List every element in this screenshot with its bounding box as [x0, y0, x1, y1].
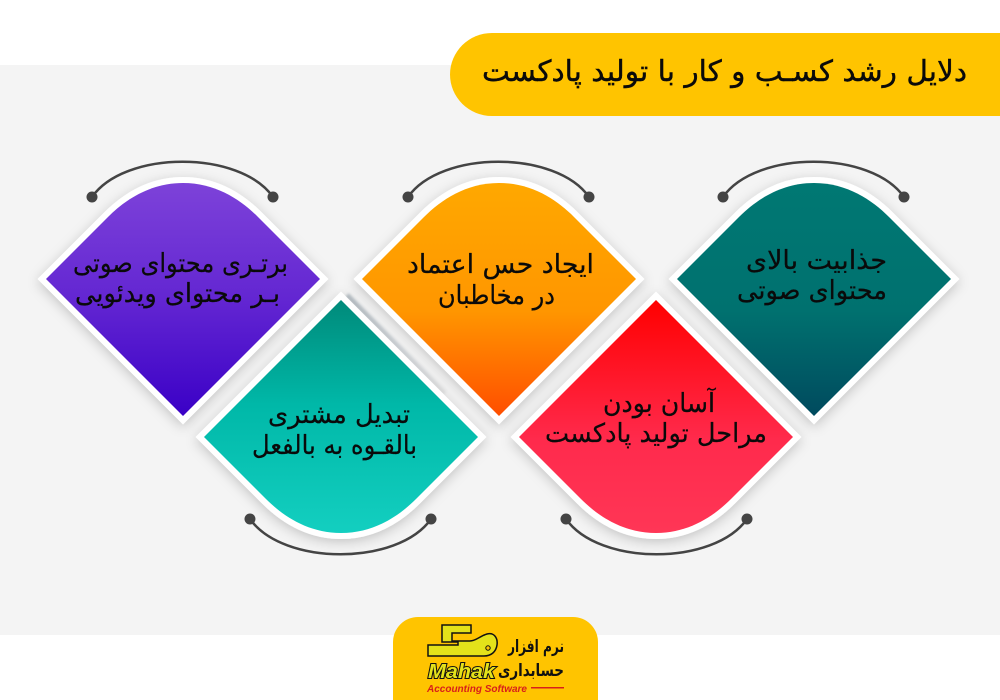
icon: mahak mark: [428, 625, 497, 656]
logo name: Mahak: [428, 661, 496, 683]
panel: green diamond: بالقـوه به بالفعل: [252, 431, 417, 461]
panel: dark teal diamond: جذابیت بالای: [746, 246, 887, 276]
panel: green diamond: [204, 295, 478, 554]
panel: dark teal diamond: [677, 162, 951, 416]
logo persian text: نرم افزار: [507, 637, 564, 657]
logo badge: حسابداری: [498, 661, 564, 681]
logo badge: [393, 617, 598, 700]
panel: red diamond: [519, 300, 793, 554]
panel: red diamond: مراحل تولید پادکست: [545, 419, 767, 449]
panel: green diamond: تبدیل مشتری: [268, 400, 410, 430]
panel: red diamond: آسان بودن: [603, 387, 717, 419]
panel: orange diamond: [362, 162, 636, 416]
panel: purple diamond: برتـری محتوای صوتی: [73, 249, 288, 279]
panel: dark teal diamond: محتوای صوتی: [737, 276, 887, 306]
logo tagline: Accounting Software: [426, 684, 527, 695]
title banner: دلایل رشد کسـب و کار با تولید پادکست: [482, 54, 967, 89]
panel: orange diamond: ایجاد حس اعتماد: [407, 250, 594, 280]
panel: purple diamond: [46, 162, 320, 416]
title banner: [450, 33, 1000, 116]
panel: purple diamond: بـر محتوای ویدئویی: [75, 279, 280, 309]
panel: orange diamond: در مخاطبان: [438, 281, 555, 311]
